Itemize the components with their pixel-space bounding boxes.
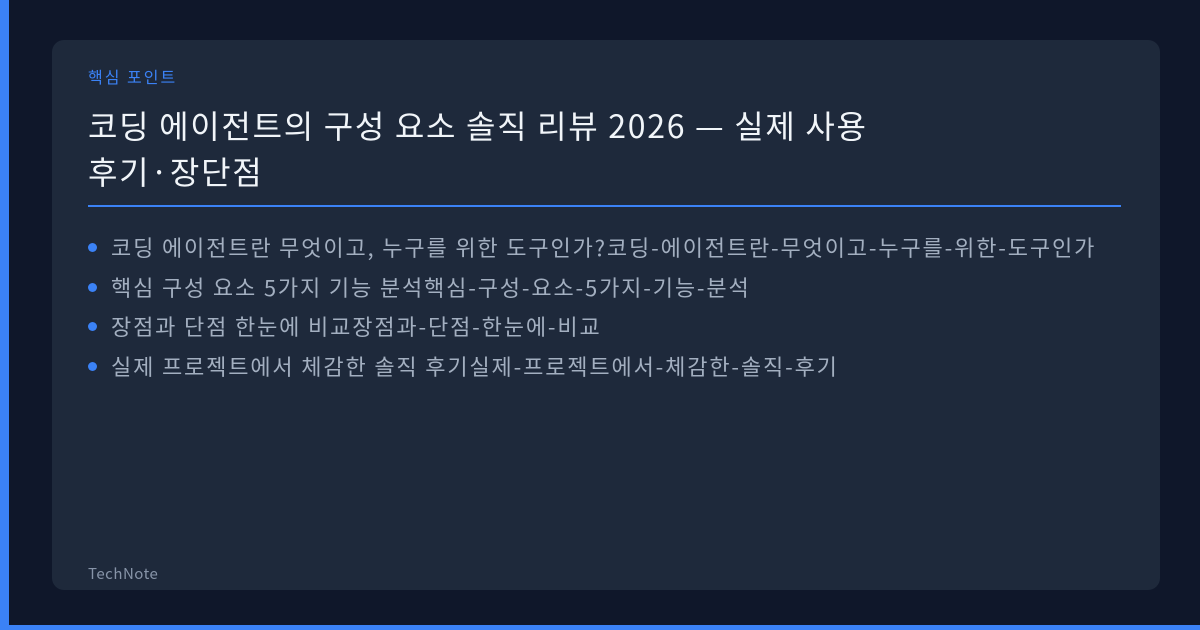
kicker label: 핵심 포인트 xyxy=(88,64,177,88)
title xyxy=(88,102,868,194)
bullet 3: 장점과 단점 한눈에 비교장점과-단점-한눈에-비교 xyxy=(111,310,602,342)
bullet 4: 실제 프로젝트에서 체감한 솔직 후기실제-프로젝트에서-체감한-솔직-후기 xyxy=(111,350,839,382)
brand footer: TechNote xyxy=(88,563,158,584)
title: 코딩 에이전트의 구성 요소 솔직 리뷰 2026 — 실제 사용 xyxy=(88,102,868,148)
bullet 1: 코딩 에이전트란 무엇이고, 누구를 위한 도구인가?코딩-에이전트란-무엇이고-누구를-위한-도구인가 xyxy=(111,231,1096,263)
bullet list xyxy=(88,231,1096,382)
title: 후기·장단점 xyxy=(88,148,263,194)
bullet 2: 핵심 구성 요소 5가지 기능 분석핵심-구성-요소-5가지-기능-분석 xyxy=(111,271,751,303)
